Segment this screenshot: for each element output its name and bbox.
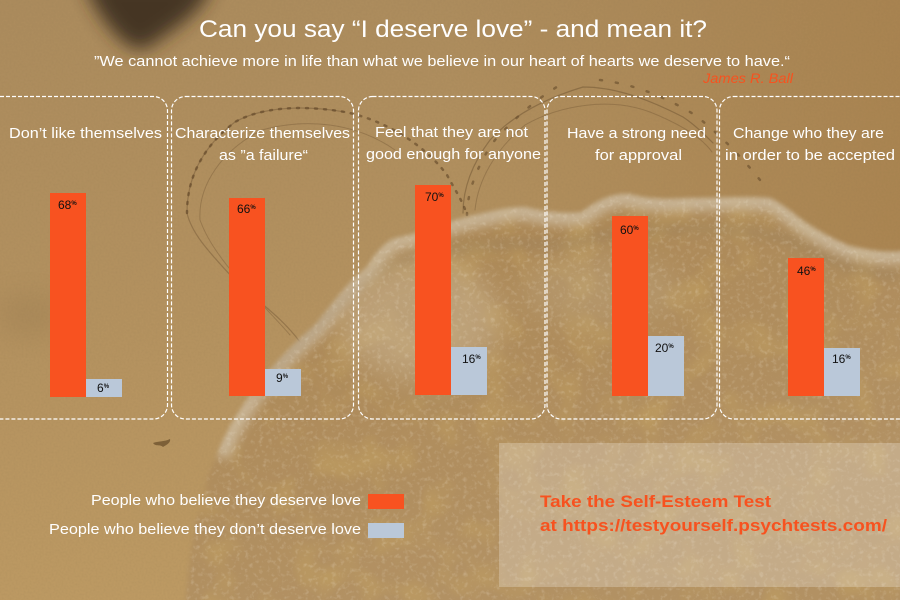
bar: deserve love 46% [788, 258, 824, 396]
panel: characterize themselves as a failure [172, 96, 354, 419]
legend label: deserve love: People who believe they deserve love [91, 492, 361, 509]
panel heading: for approval [595, 147, 682, 164]
legend [49, 492, 404, 538]
panel heading: Feel that they are not [375, 124, 529, 141]
value 68%: % [71, 201, 77, 207]
call-to-action text: Take the Self-Esteem Test [540, 492, 771, 511]
value 70%: % [438, 193, 444, 199]
legend swatch: blue-grey [368, 523, 404, 538]
translucent panel [499, 443, 900, 587]
panel heading: Have a strong need [567, 125, 706, 142]
bar: deserve love 68% [50, 193, 86, 397]
call-to-action box [499, 443, 900, 587]
panel outline [720, 96, 900, 419]
panel: not good enough [358, 96, 545, 419]
panel heading: as ”a failure“ [219, 147, 308, 164]
value 16%: % [845, 355, 851, 361]
background: foam wave [186, 192, 900, 600]
bar: deserve love 60% [612, 216, 648, 396]
value 6%: % [104, 384, 110, 390]
value 66%: % [250, 205, 256, 211]
panel: need for approval [547, 96, 717, 419]
bar: deserve love 66% [229, 198, 265, 396]
value 60%: % [633, 226, 639, 232]
panel outline [172, 96, 354, 419]
legend label: don't deserve love: People who believe they don’t deserve love [49, 521, 361, 538]
quote: ”We cannot achieve more in life than what we believe in our heart of hearts we deserve to have.“ [94, 53, 790, 70]
panel heading: good enough for anyone [366, 146, 541, 163]
value 68%: 68 [58, 198, 71, 212]
value 9%: 9 [276, 371, 283, 385]
value 16%: 16 [832, 352, 845, 366]
value 20%: 20 [655, 341, 668, 355]
panel: change to be accepted [720, 96, 900, 419]
value 70%: 70 [425, 190, 438, 204]
value 60%: 60 [620, 223, 633, 237]
bar: don't deserve love 6% [86, 379, 122, 397]
value 6%: 6 [97, 381, 104, 395]
panel outline [0, 96, 168, 419]
panel heading: Change who they are [733, 125, 884, 142]
background: heart drawn in sand [187, 80, 760, 342]
bar: don't deserve love 20% [648, 336, 684, 396]
bar: don't deserve love 9% [265, 369, 301, 396]
value 46%: % [810, 267, 816, 273]
panel heading: in order to be accepted [725, 147, 895, 164]
title: Can you say “I deserve love” - and mean it? [199, 16, 707, 43]
panel outline [358, 96, 545, 419]
background: pebble in sand [153, 439, 170, 447]
legend swatch: orange [368, 494, 404, 509]
value 16%: 16 [462, 352, 475, 366]
call-to-action text: at https://testyourself.psychtests.com/ [540, 516, 887, 535]
value 66%: 66 [237, 202, 250, 216]
value 20%: % [668, 344, 674, 350]
panel: don't like themselves [0, 96, 168, 419]
bar: don't deserve love 16% [451, 347, 487, 395]
panel heading: Characterize themselves [175, 125, 350, 142]
quote attribution: James R. Ball [702, 70, 794, 86]
panel heading: Don’t like themselves [9, 125, 162, 142]
value 9%: % [283, 374, 289, 380]
background: shadow at top [82, 0, 212, 50]
value 16%: % [475, 355, 481, 361]
bar: don't deserve love 16% [824, 348, 860, 396]
panel outline [547, 96, 717, 419]
value 46%: 46 [797, 264, 810, 278]
bar: deserve love 70% [415, 185, 451, 395]
